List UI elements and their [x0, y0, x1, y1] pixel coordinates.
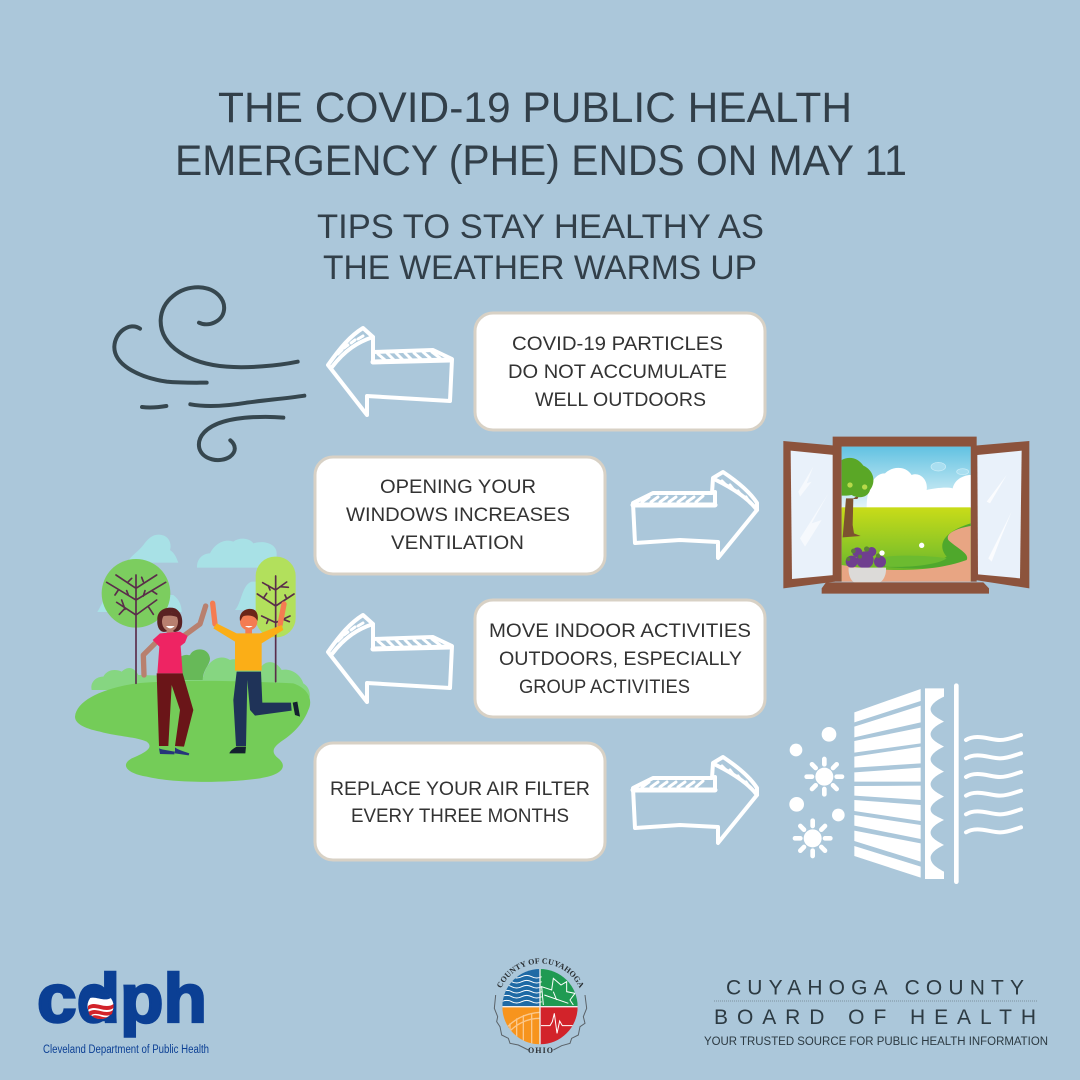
panel: move activities outdoors: [475, 600, 765, 717]
ground: [75, 681, 310, 782]
panel: replace air filter: REPLACE YOUR AIR FILTER: [330, 778, 590, 800]
panel: covid particles outdoors: DO NOT ACCUMULATE: [508, 361, 727, 383]
woman: [143, 606, 206, 755]
scalloped filter plate: [925, 688, 944, 879]
title: [175, 84, 907, 185]
panel: opening windows: WINDOWS INCREASES: [346, 504, 570, 526]
logo: County of Cuyahoga seal: [494, 958, 588, 1055]
clean air waves: [966, 735, 1021, 832]
dust particles: [789, 727, 845, 821]
arrow: pointing right to window: [633, 472, 757, 558]
germ: upper: [807, 759, 842, 794]
view: sky: [842, 447, 971, 508]
seal arc text: COUNTY OF CUYAHOGA: [497, 958, 584, 988]
view: grass: [842, 507, 971, 581]
panel: opening windows: OPENING YOUR: [380, 476, 536, 498]
icon: open window: [783, 437, 1029, 594]
logo: Cuyahoga County Board of Health: BOARD OF HEALTH: [714, 1006, 1036, 1029]
subtitle: [317, 208, 764, 287]
seal quadrants: [502, 969, 578, 1045]
panel: opening windows: [315, 457, 605, 574]
subtitle: TIPS TO STAY HEALTHY AS: [317, 208, 764, 246]
seal gear outline: [494, 995, 587, 1050]
panel: covid particles outdoors: COVID-19 PARTICLES: [512, 333, 723, 355]
panel: opening windows: VENTILATION: [391, 532, 524, 554]
view: white clouds: [867, 468, 971, 508]
arrow: pointing left to park: [328, 615, 452, 702]
filter slats: [854, 689, 921, 878]
vertical bar: [954, 683, 959, 884]
man: [213, 603, 300, 753]
back hedge: [91, 657, 310, 707]
view: dark grass: [883, 523, 971, 568]
panel: replace air filter: [315, 743, 605, 860]
view: tree: [842, 458, 873, 537]
arrow: pointing left to wind: [328, 328, 452, 415]
germ: lower: [795, 821, 830, 856]
clouds: [97, 535, 277, 612]
panel: move activities outdoors: MOVE INDOOR ACTIVITIES: [489, 620, 751, 642]
tree: tall: [256, 557, 296, 682]
panel: covid particles outdoors: [475, 313, 765, 430]
right shutter: [975, 441, 1029, 588]
tree: round: [102, 559, 170, 683]
view: dirt path: [842, 526, 971, 582]
seal ohio text: OHIO: [528, 1046, 553, 1055]
view: green patch over path: [885, 556, 947, 567]
panel: replace air filter: EVERY THREE MONTHS: [351, 805, 569, 827]
panel: move activities outdoors: GROUP ACTIVITIES: [519, 676, 690, 698]
view: small clouds: [931, 462, 969, 475]
panel: covid particles outdoors: WELL OUTDOORS: [535, 389, 706, 411]
title: EMERGENCY (PHE) ENDS ON MAY 11: [175, 137, 907, 185]
view: flower pot: [846, 543, 924, 583]
subtitle: THE WEATHER WARMS UP: [323, 249, 757, 287]
window frame: [833, 437, 977, 582]
panel: move activities outdoors: OUTDOORS, ESPECIALLY: [499, 648, 742, 670]
logo: Cuyahoga County Board of Health: CUYAHOGA COUNTY: [726, 976, 1024, 1000]
illustration: two people high-fiving in a park: [75, 535, 310, 782]
left shutter: [783, 441, 835, 588]
logo: Cuyahoga County Board of Health: [704, 976, 1048, 1048]
icon: wind: [114, 287, 304, 460]
window sill: [822, 582, 989, 594]
logo: Cleveland Department of Public Health: cdph: [37, 960, 207, 1037]
dark bush: [181, 649, 210, 680]
arrow: pointing right to air filter: [633, 757, 757, 843]
logo: Cuyahoga County Board of Health: YOUR TRUSTED SOURCE FOR PUBLIC HEALTH INFORMATION: [704, 1036, 1048, 1048]
flag emblem: [85, 990, 116, 1022]
title: THE COVID-19 PUBLIC HEALTH: [218, 84, 852, 132]
logo: Cleveland Department of Public Health: Cleveland Department of Public Health: [43, 1044, 209, 1056]
icon: air filter: [789, 683, 1021, 884]
